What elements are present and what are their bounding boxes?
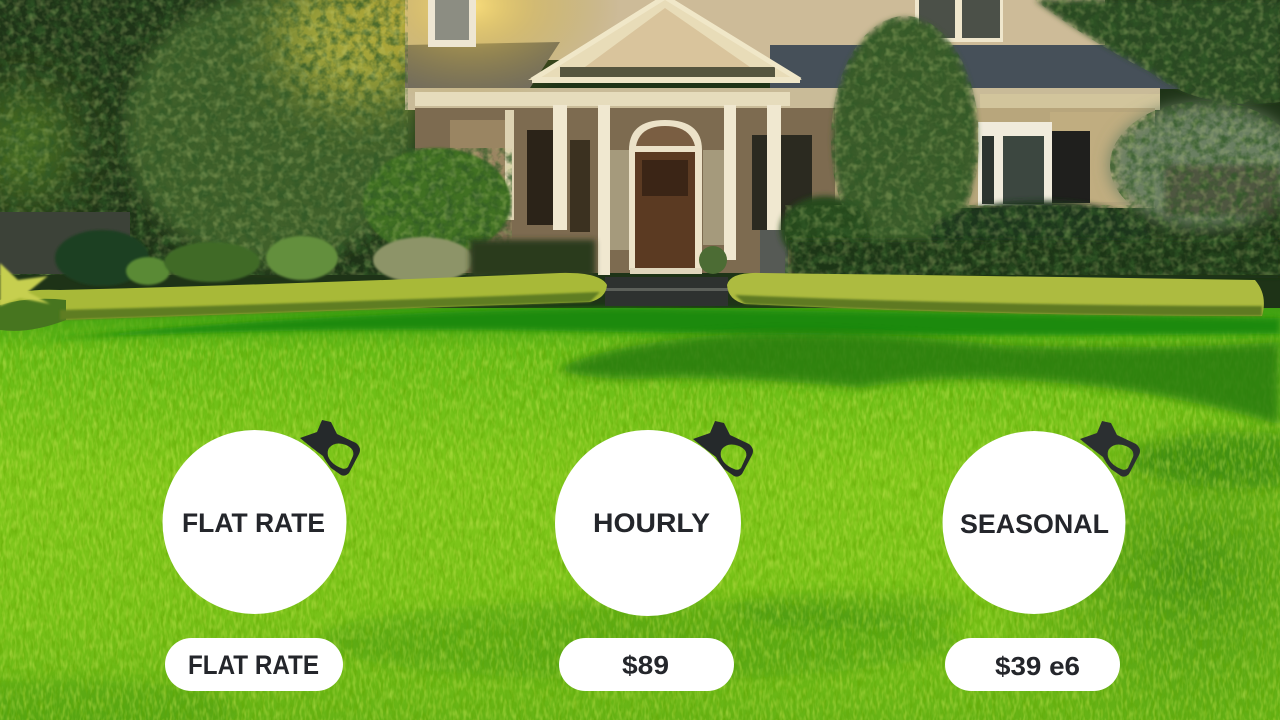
column: hourly <box>555 421 753 691</box>
flat rate pill <box>165 638 343 691</box>
tree backdrop <box>0 0 1280 320</box>
hourly circle <box>555 430 741 616</box>
porch <box>415 92 812 275</box>
tree shadows on lawn <box>40 308 1280 425</box>
hourly pill <box>559 638 734 691</box>
icon: hourly tag <box>693 421 753 477</box>
hourly price: $89 <box>622 650 669 680</box>
hedges and steps <box>0 263 1264 331</box>
seasonal pill <box>945 638 1120 691</box>
gable and upper window <box>428 0 1003 83</box>
flat rate pill label: FLAT RATE <box>188 650 319 680</box>
flat rate circle label: FLAT RATE <box>182 508 325 538</box>
seasonal circle label: SEASONAL <box>960 509 1109 539</box>
fence and low shrubs <box>0 212 727 286</box>
icon: seasonal tag <box>1080 421 1140 477</box>
house walls and roof <box>405 0 1180 273</box>
column: seasonal <box>942 421 1140 691</box>
trees and shrubs <box>363 0 1280 276</box>
seasonal price: $39 e6 <box>995 651 1080 681</box>
grass texture <box>0 310 1280 720</box>
right window and shutter <box>978 122 1090 206</box>
soft lawn shading <box>0 400 1280 720</box>
icon: flat rate tag <box>300 420 360 476</box>
column: flat rate <box>162 420 360 691</box>
flat rate circle <box>162 430 346 614</box>
seasonal circle <box>942 431 1126 614</box>
sun glow <box>320 0 620 105</box>
hourly circle label: HOURLY <box>593 508 710 538</box>
foliage texture <box>0 0 1280 280</box>
lawn <box>0 308 1280 720</box>
